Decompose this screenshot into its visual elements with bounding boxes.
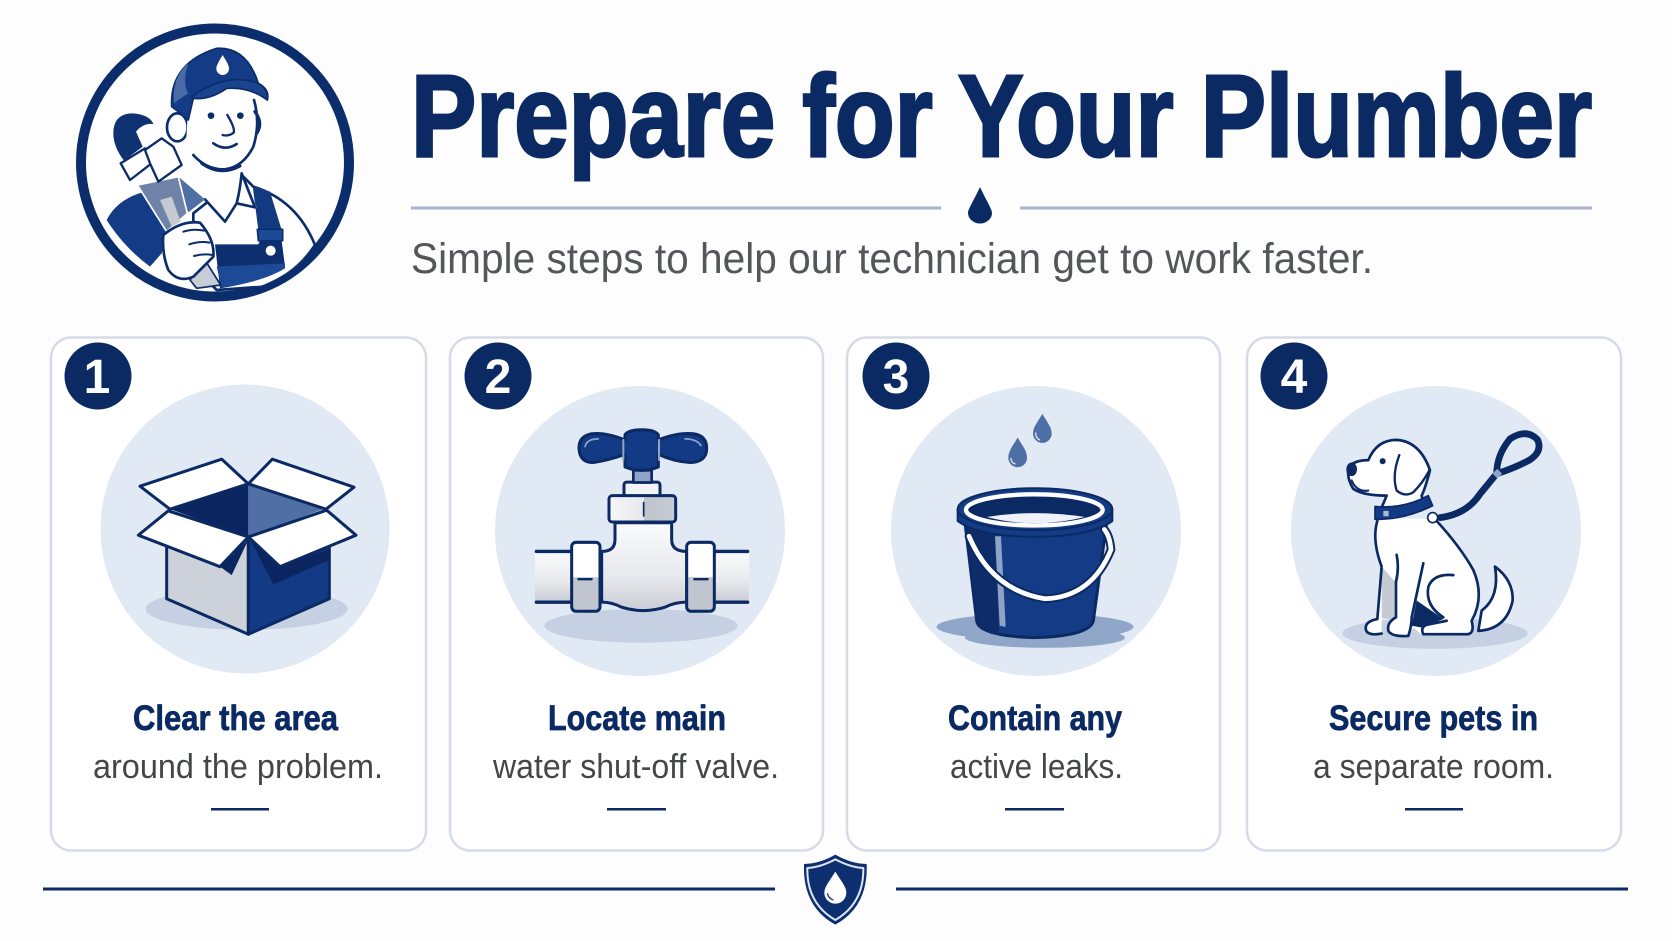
number badge 3: 3 [883,351,909,404]
body text: water shut-off valve. [492,748,779,786]
icon: shield with water drop [804,855,867,925]
heading: Clear the area [133,699,338,738]
body text: a separate room. [1313,748,1554,786]
number badge 4: 4 [1281,351,1308,404]
heading: Locate main [548,699,726,738]
number badge 2: 2 [485,351,511,404]
panel: step 3 contain leaks [847,338,1220,850]
title divider with drop [411,187,1592,224]
card frame [51,338,426,850]
heading: Secure pets in [1329,699,1538,738]
subtitle: Simple steps to help our technician get to work faster. [411,235,1373,283]
card frame [847,338,1220,850]
icon: water drop [968,187,992,224]
number badge 1: 1 [84,351,110,404]
body text: active leaks. [950,748,1123,786]
body text: around the problem. [93,748,383,786]
plumber badge [81,28,349,296]
badge ring [81,28,349,296]
card frame [450,338,823,850]
footer rule with shield [43,855,1628,925]
icon: water shut-off valve [495,386,785,676]
icon: bucket catching drips [891,386,1181,676]
icon: open cardboard box [100,384,390,674]
card frame [1247,338,1621,850]
number badge 2 [464,342,532,410]
heading: Contain any [948,699,1122,738]
number badge 1 [64,342,132,410]
panel: step 2 locate valve [450,338,823,850]
icon: dog on a leash [1291,386,1581,676]
number badge 3 [862,342,930,410]
number badge 4 [1260,342,1328,410]
plumber figure [107,48,315,290]
panel: step 1 clear the area [51,338,426,850]
panel: step 4 secure pets [1247,338,1621,850]
